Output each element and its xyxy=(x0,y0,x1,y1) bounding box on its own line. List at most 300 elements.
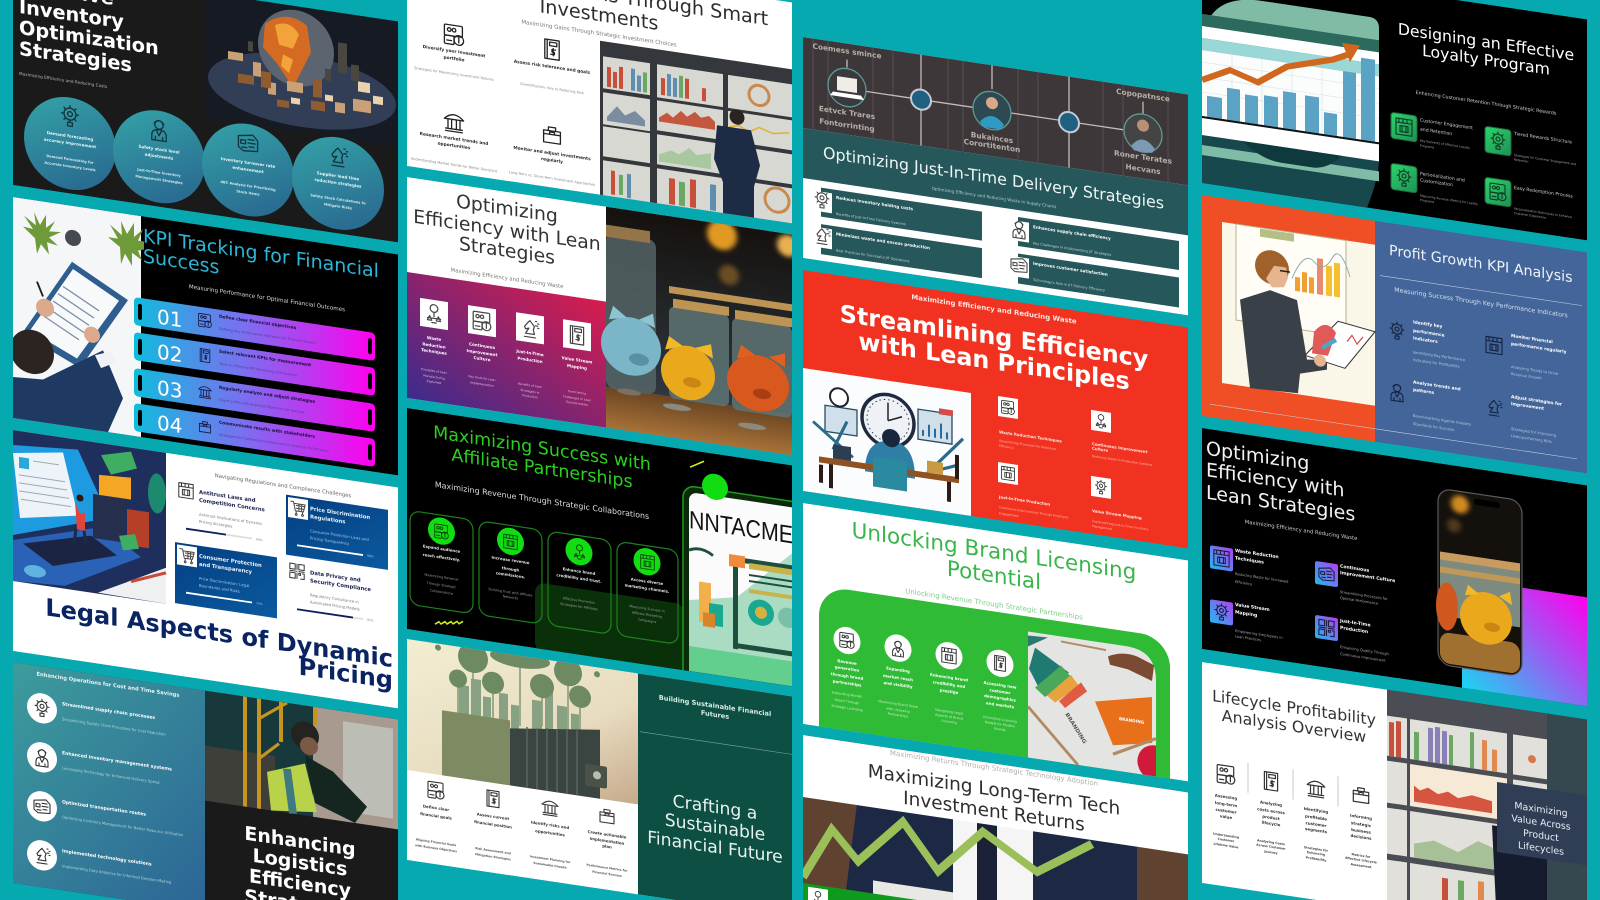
card: expand audience: Maximizing Revenue xyxy=(425,573,458,582)
callout box: Value Across xyxy=(1511,813,1571,833)
column: costs across lifecycle: Across Customer xyxy=(1256,843,1286,851)
card: data privacy: Security Compliance xyxy=(310,578,371,593)
slide: profit growth KPI xyxy=(1202,195,1587,473)
step: assess position: Assess current xyxy=(477,811,509,821)
title: Logistics xyxy=(253,844,347,881)
item: inventory systems xyxy=(26,742,172,784)
divider xyxy=(640,732,792,754)
item: redemption xyxy=(1485,177,1573,224)
subtitle: Maximizing Returns Through Strategic Technology Adoption xyxy=(890,748,1098,788)
column: costs across lifecycle: Analyzing Costs xyxy=(1257,838,1285,846)
card: antitrust laws: Competition Concerns xyxy=(199,498,265,514)
bar item 03: 03 xyxy=(157,376,182,403)
item: adjust strategies: improvement xyxy=(1511,401,1544,412)
column: customer value: Lifetime Value xyxy=(1213,842,1239,849)
image: analytics wall xyxy=(1387,690,1547,900)
item: engagement: Programs xyxy=(1420,143,1435,150)
item: waste reduction xyxy=(1210,544,1288,592)
item: just in time: Just-In-Time xyxy=(515,348,544,357)
big title: Crafting a xyxy=(673,792,757,824)
card: access diverse xyxy=(617,541,678,644)
subtitle: Maximizing Efficiency and Reducing Waste xyxy=(1245,519,1357,542)
slide: long-term tech returns xyxy=(803,735,1188,900)
column: strategic decisions: business xyxy=(1351,827,1371,835)
item: research: Understanding Market Trends for Better Decisions xyxy=(411,157,498,173)
item: research xyxy=(410,114,498,172)
panel: teal list xyxy=(13,662,205,900)
item: market reach: Partnerships xyxy=(888,712,908,719)
slide: KPI tracking xyxy=(10,197,398,475)
item: assess risk xyxy=(514,34,591,96)
panel: gradient items xyxy=(407,272,606,428)
card: data privacy: Data Privacy and xyxy=(310,570,361,584)
item: holding costs: Reduces inventory holding costs xyxy=(836,195,914,211)
callout box: Maximizing xyxy=(1514,801,1568,819)
card: access diverse: marketing channels. xyxy=(625,582,670,594)
item: monitor: regularly xyxy=(541,156,563,165)
item: revenue generation: Expanding Market xyxy=(832,690,863,699)
item: just in time: Production xyxy=(522,393,538,400)
branding labels: BRANDING xyxy=(1119,716,1145,725)
item: brand credibility: Enhancing brand xyxy=(930,672,968,683)
bar item 02 xyxy=(134,332,375,396)
card: data privacy: Automated Pricing Models xyxy=(310,599,360,612)
column: profitable segments: customer xyxy=(1305,820,1327,828)
card: safety stock: Just-In-Time Inventory xyxy=(136,167,181,178)
card: access diverse: Campaigns xyxy=(638,617,656,624)
item: assess risk: Diversification: Key to Reducing Risk xyxy=(520,82,585,95)
bar item 01: Define clear financial objectives xyxy=(219,314,297,331)
item: monitor financial: Revenue Growth xyxy=(1511,372,1542,381)
slide: lean strategies with piggy banks xyxy=(407,173,799,456)
card: safety stock: adjustments xyxy=(145,152,174,161)
image: network diagram: Fontorrinting xyxy=(819,116,875,134)
phone mockup with piggy bank xyxy=(1436,488,1522,677)
item: just in time: Production xyxy=(517,355,543,364)
slide: brand licensing xyxy=(803,503,1188,810)
businessman xyxy=(1492,825,1547,900)
slide: lean strategies dark xyxy=(1202,428,1587,706)
image: world logistics globe xyxy=(208,0,398,130)
item: identify KPIs: Identifying Key Performance xyxy=(1413,350,1466,362)
panel heading: Futures xyxy=(701,709,729,721)
subtitle: Measuring Success Through Key Performance Indicators xyxy=(1394,287,1568,319)
item: value stream: Value Stream xyxy=(1235,602,1270,613)
bar item 03: Aligning KPIs with Business Objectives for Success xyxy=(219,398,305,414)
step: assess position xyxy=(474,788,512,862)
item: just-in-time xyxy=(998,462,1068,526)
item: waste reduction: Waste xyxy=(427,335,441,342)
item: market reach: with Licensing xyxy=(886,706,910,714)
item: personalization: Programs xyxy=(1420,198,1435,204)
title: Maximizing Success with xyxy=(433,423,651,475)
card: consumer protection: and Transparency xyxy=(199,562,252,576)
item: continuous improvement: Continuous Improvement xyxy=(1092,441,1148,454)
card: inventory turnover: ABC Analysis for Prioritizing xyxy=(220,180,276,192)
card: consumer protection: 75% xyxy=(256,601,263,606)
image: clock and desk sketch xyxy=(803,368,971,516)
column: strategic decisions: Informing xyxy=(1350,813,1372,821)
item: continuous improvement: Reducing Waste in Production Systems xyxy=(1092,454,1153,467)
column: profitable segments: segments xyxy=(1305,826,1328,834)
divider lines xyxy=(1210,250,1582,460)
step: identify risks: Investment Planning for xyxy=(530,854,571,864)
item: revenue generation xyxy=(831,625,863,712)
title: Lifecycle Profitability xyxy=(1212,686,1376,729)
item: continuous improvement: Streamlining Processes for xyxy=(1340,590,1388,601)
item: revenue generation: through brand xyxy=(831,671,863,681)
title: Strategies xyxy=(19,37,132,77)
card: enhance brand xyxy=(548,531,611,634)
item: tiered rewards: Retention xyxy=(1514,158,1528,164)
card: increase revenue: through xyxy=(502,565,519,573)
subtitle: Navigating Regulations and Compliance Challenges xyxy=(215,473,351,499)
item: market reach: and visibility xyxy=(884,680,913,689)
step: identify risks xyxy=(530,798,571,870)
card: expand audience: Collaborations xyxy=(430,588,454,596)
item: waste reduction: Reduction xyxy=(422,341,446,350)
item: value stream: Transformation xyxy=(565,400,588,407)
item: waste reduction: Explained xyxy=(427,379,441,385)
column: strategic decisions: decisions xyxy=(1350,833,1372,841)
card: inventory turnover: Stock Items xyxy=(236,189,260,197)
card: data privacy xyxy=(290,563,374,623)
item: minimizes waste: Best Practices for Successful JIT Operations xyxy=(836,248,910,263)
image: man reviewing clipboard xyxy=(10,197,144,438)
column: costs across lifecycle: Journey xyxy=(1263,849,1278,855)
title: Optimizing xyxy=(456,190,558,227)
item: identify KPIs: indicators xyxy=(1413,335,1438,345)
item: market reach: market reach xyxy=(883,673,913,682)
item: research: Research market trends and xyxy=(420,131,488,147)
item: revenue generation: generation xyxy=(835,664,859,673)
subtitle: Maximizing Revenue Through Strategic Collaborations xyxy=(435,480,649,521)
card: antitrust laws: Antitrust Implications of Dynamic xyxy=(199,512,262,526)
slide: affiliate partnerships xyxy=(407,408,813,704)
item: continuous improvement: Implementation xyxy=(470,380,494,388)
card: price discrimination xyxy=(286,495,388,570)
item: supply chain efficiency: Enhances supply chain efficiency xyxy=(1033,224,1111,241)
panel: green xyxy=(819,585,1170,808)
item: value stream: Value Stream xyxy=(562,355,592,365)
item: supply chain xyxy=(27,693,166,736)
item: new demographics: Innovative Licensing xyxy=(983,715,1017,724)
glow panel xyxy=(535,582,685,674)
callout box xyxy=(1497,782,1587,865)
item: holding costs: Benefits of Just-In-Time Delivery Systems xyxy=(836,212,906,226)
item: continuous improvement xyxy=(1091,410,1153,467)
item: waste reduction: Streamlining Processes for Maximum xyxy=(999,439,1056,451)
column: costs across lifecycle xyxy=(1256,770,1286,857)
column: strategic decisions: strategic xyxy=(1351,820,1372,828)
branding labels: BRANDING xyxy=(1063,712,1087,745)
image: network diagram xyxy=(803,37,1188,185)
item: adjust strategies: Strategies for Improving xyxy=(1511,427,1557,438)
image: network diagram: Eetvck Trares xyxy=(819,104,876,121)
subtitle: Enhancing Customer Retention Through Strategic Rewards xyxy=(1416,90,1557,117)
big title xyxy=(647,788,783,868)
column: strategic decisions: Assessment xyxy=(1351,862,1372,869)
item: monitor financial: Monitor financial xyxy=(1511,333,1553,345)
card: demand forecasting: Demand forecasting xyxy=(47,130,93,142)
image: tablet with growth chart xyxy=(1202,0,1379,209)
card: price discrimination: Regulations xyxy=(310,514,345,526)
item: monitor: Monitor and adjust investments xyxy=(513,145,591,162)
item: personalization: Personalization and xyxy=(1420,171,1465,184)
slide: inventory optimization xyxy=(13,0,398,242)
callout box: Product xyxy=(1523,828,1559,844)
image: analyst with chart xyxy=(1222,222,1375,407)
title: Success xyxy=(143,244,219,279)
card: antitrust laws: 60% xyxy=(256,537,263,542)
card: enhance brand: Effective Promotion xyxy=(563,596,595,605)
title: Lean Strategies xyxy=(1206,481,1355,526)
item: assess risk: Assess risk tolerance and goals xyxy=(514,59,591,76)
card: data privacy: Regulatory Compliance in xyxy=(310,592,359,605)
column: profitable segments: profitable xyxy=(1305,813,1327,822)
item: value stream xyxy=(1091,476,1148,536)
item: just-in-time: Just-In-Time xyxy=(1339,618,1371,629)
subtitle: Unlocking Revenue Through Strategic Partnerships xyxy=(905,586,1083,622)
title: Profit Growth KPI Analysis xyxy=(1389,243,1573,286)
card: price discrimination: Price Discrimination xyxy=(310,506,370,521)
card: enhance brand: credibility and trust. xyxy=(556,572,602,584)
item: transportation: Optimized transportation routes xyxy=(62,799,146,818)
step: identify risks: Identify risks and xyxy=(531,819,569,830)
item: monitor xyxy=(509,121,595,187)
step: identify risks: Sustainable Growth xyxy=(533,861,567,870)
panel heading: Building Sustainable Financial xyxy=(659,694,771,718)
item: diversify: Strategies for Maximizing Investment Returns xyxy=(414,66,494,82)
subtitle: Maximizing Efficiency and Reducing Costs xyxy=(19,71,107,89)
item: adjust strategies: Adjust strategies for xyxy=(1511,394,1563,408)
card: increase revenue xyxy=(479,521,542,624)
bar item 01: Defining Key Performance Indicators for Financial Growth xyxy=(219,327,316,345)
title: Pricing xyxy=(299,653,393,695)
panel: dark green xyxy=(638,673,792,900)
card: price discrimination: Consumer Protection Laws and xyxy=(310,528,369,542)
item: just-in-time: Enhancing Quality Through xyxy=(1340,645,1389,656)
title xyxy=(244,822,356,900)
step: define goals xyxy=(415,779,457,853)
image: piggy banks in jars xyxy=(601,202,799,456)
item: analyze trends: patterns xyxy=(1413,387,1435,396)
subtitle: Maximizing Efficiency and Reducing Waste xyxy=(451,268,563,290)
image: laptop with money stacks xyxy=(13,430,166,604)
column: profitable segments xyxy=(1304,780,1329,863)
slide: smart investments xyxy=(407,0,792,223)
item: value stream: Empowering Employees in xyxy=(1235,629,1283,640)
slide: legal aspects of dynamic pricing xyxy=(13,430,398,708)
step: create plan: Performance Metrics for xyxy=(587,863,628,873)
item: revenue generation: Strategic Licensing xyxy=(831,704,863,712)
card: inventory turnover xyxy=(202,124,293,216)
column: customer value: value xyxy=(1220,813,1232,820)
card: demand forecasting xyxy=(24,97,114,190)
title: Streamlining Efficiency xyxy=(840,300,1149,373)
title: Unlocking Brand Licensing xyxy=(852,518,1136,586)
item: continuous improvement: Culture xyxy=(1092,446,1108,453)
step: define goals: Aligning Financial Goals xyxy=(416,837,456,847)
slide: loyalty program xyxy=(1202,0,1587,240)
card: consumer protection: Consumer Protection xyxy=(199,554,262,569)
card: demand forecasting: Demand Forecasting for xyxy=(46,154,94,165)
item: waste reduction: Techniques xyxy=(1235,555,1264,566)
column: strategic decisions xyxy=(1345,786,1377,870)
item: supply chain: Streamlined supply chain processes xyxy=(62,701,155,721)
card: safety stock xyxy=(113,110,204,204)
title xyxy=(413,184,601,276)
item: brand credibility: Navigating Legal xyxy=(935,708,963,716)
card: increase revenue: commissions. xyxy=(496,570,526,580)
step: assess position: Mitigation Strategies xyxy=(475,852,511,862)
item: personalization: Measuring Success: Metrics for Loyalty xyxy=(1420,193,1478,206)
item: waste reduction: Reducing Waste for Increased xyxy=(1235,572,1288,584)
title: Investment Returns xyxy=(903,788,1085,836)
card: demand forecasting: accuracy improvement xyxy=(44,137,96,149)
title: Maximizing Long-Term Tech xyxy=(868,761,1120,820)
bar item 01: 01 xyxy=(157,305,182,332)
column: strategic decisions: Effective Lifecycle xyxy=(1345,856,1377,865)
card: supplier lead time: Supplier lead time xyxy=(317,170,359,182)
item: waste reduction: Waste Reduction Techniques xyxy=(999,429,1062,444)
title: Efficiency with Lean xyxy=(413,206,601,256)
item: just-in-time: Engagement xyxy=(999,511,1020,518)
item: brand credibility: Aspects of Brand xyxy=(935,713,963,721)
step: create plan: Create actionable xyxy=(588,829,627,840)
step: define goals: with Business Objectives xyxy=(415,843,457,853)
item: monitor: Long-Term vs. Short-Term Investment Approaches xyxy=(509,170,595,187)
dividers xyxy=(1248,763,1338,806)
item: just-in-time: Just-In-Time Production xyxy=(998,494,1050,507)
step: identify risks: opportunities xyxy=(535,828,566,838)
bar item 04: 04 xyxy=(157,411,182,438)
item: technology: Implemented technology solutions xyxy=(62,848,152,868)
item: minimizes waste xyxy=(817,224,982,278)
title: Enhancing xyxy=(244,822,356,861)
item: new demographics xyxy=(983,647,1017,734)
subtitle: Maximizing Efficiency and Reducing Waste xyxy=(911,293,1077,326)
column: profitable segments: Strategies for xyxy=(1304,845,1329,853)
item: analyze trends: Analyze trends and xyxy=(1413,379,1461,393)
column: customer value: Assessing xyxy=(1215,793,1237,801)
card: supplier lead time: Safety Stock Calculations to xyxy=(310,193,366,206)
item: redemption: Customer Experience xyxy=(1514,211,1546,220)
item: identify KPIs: Indicators for Profitability xyxy=(1413,358,1460,369)
item: waste reduction: Efficiency xyxy=(999,444,1014,450)
item: adjust strategies xyxy=(1489,391,1563,446)
item: continuous improvement xyxy=(467,305,497,388)
column: customer value: customer xyxy=(1215,807,1237,815)
title: Loyalty Program xyxy=(1422,41,1550,79)
item: waste reduction xyxy=(420,298,448,386)
item: just-in-time: Production xyxy=(1340,625,1368,635)
column: customer value: Understanding xyxy=(1213,832,1239,839)
card: supplier lead time xyxy=(292,136,384,230)
item: waste reduction: Waste Reduction xyxy=(1235,548,1279,560)
item: engagement: Key Elements of Effective Loyalty xyxy=(1420,138,1470,150)
image: network diagram: Hecvans xyxy=(1125,162,1161,176)
item: value stream: Management xyxy=(1092,524,1113,531)
card: supplier lead time: Mitigate Risks xyxy=(324,202,352,210)
item: diversify: portfolio xyxy=(444,54,464,64)
column: customer value xyxy=(1213,764,1239,849)
image: wallet with city and trees xyxy=(407,633,638,804)
card: access diverse: Access diverse xyxy=(631,576,664,586)
item: brand credibility xyxy=(930,639,968,727)
card: antitrust laws: Pricing Strategies xyxy=(199,519,232,529)
bar item 03 xyxy=(134,368,375,432)
step: assess position: Risk Assessment and xyxy=(475,846,511,855)
item: identify KPIs: Identify key xyxy=(1413,319,1442,330)
item: brand credibility: credibility and xyxy=(933,679,965,689)
item: new demographics: Models for Modern xyxy=(985,720,1015,729)
slide: lifecycle profitability xyxy=(1202,662,1587,900)
item: continuous improvement: Continuous xyxy=(469,341,496,350)
item: waste reduction: Efficiency xyxy=(1235,580,1253,587)
card: consumer protection xyxy=(175,542,277,618)
item: customer satisfaction: Technology's Role in JIT Delivery Efficiency xyxy=(1032,278,1105,292)
item: customer satisfaction xyxy=(1011,252,1179,308)
column: profitable segments: Enhancing xyxy=(1307,850,1325,857)
card: price discrimination: 90% xyxy=(367,554,374,559)
big title: Sustainable xyxy=(665,810,765,845)
card: safety stock: Safety stock level xyxy=(138,144,180,155)
column: strategic decisions: Metrics for xyxy=(1352,852,1371,859)
column: profitable segments: Profitability xyxy=(1306,855,1326,863)
item: revenue generation: Revenue xyxy=(837,658,857,666)
title: Optimization xyxy=(19,16,159,60)
title band xyxy=(803,735,1188,854)
title: Efficiency with xyxy=(1206,458,1344,502)
item: market reach: Maximizing Brand Value xyxy=(878,699,918,709)
item: identify KPIs: performance xyxy=(1413,328,1445,339)
item: customer satisfaction: Improves customer satisfaction xyxy=(1033,261,1108,277)
item: engagement: Customer Engagement xyxy=(1420,118,1473,131)
item: supply chain efficiency xyxy=(1013,216,1179,270)
card: inventory turnover: Inventory turnover rate xyxy=(221,156,276,169)
item: just in time: Benefits of Lean xyxy=(518,382,542,389)
item: holding costs xyxy=(815,187,982,241)
tablet brand word: NNTACME xyxy=(689,506,793,549)
item: monitor financial: performance regularly xyxy=(1511,341,1567,355)
item: analyze trends: Standards for Success xyxy=(1413,422,1454,432)
item: tiered rewards: Strategies for Customer Engagement and xyxy=(1514,153,1576,166)
item: identify KPIs xyxy=(1390,316,1466,370)
item: technology: Implementing Data Analytics for Informed Decision-Making xyxy=(62,864,172,885)
item: market reach xyxy=(878,632,918,720)
card: access diverse: Affiliate Marketing xyxy=(632,611,662,619)
item: continuous improvement: Improvement Culture xyxy=(1340,570,1395,584)
title: Designing an Effective xyxy=(1398,19,1574,64)
bar item 02: 02 xyxy=(157,340,182,367)
branding labels xyxy=(1063,708,1145,754)
item: analyze trends xyxy=(1391,376,1472,435)
column: costs across lifecycle: product xyxy=(1262,814,1280,821)
item: adjust strategies: Underperforming KPIs xyxy=(1511,434,1552,444)
card: consumer protection: Boundaries and Risks xyxy=(199,583,240,594)
subtitle: Maximizing Gains Through Strategic Investment Choices xyxy=(521,20,677,49)
item: just-in-time xyxy=(1315,614,1389,663)
slide: just-in-time delivery xyxy=(803,37,1188,315)
decorative zigzags xyxy=(435,421,704,664)
item: inventory systems: Enhanced inventory management systems xyxy=(62,750,172,773)
card: consumer protection: Price Discrimination: Legal xyxy=(199,576,249,588)
image: warehouse worker xyxy=(205,691,398,829)
card: expand audience: Through Strategic xyxy=(426,581,456,589)
image: network diagram: Coemess smince xyxy=(813,41,881,61)
item: just in time xyxy=(515,312,544,400)
